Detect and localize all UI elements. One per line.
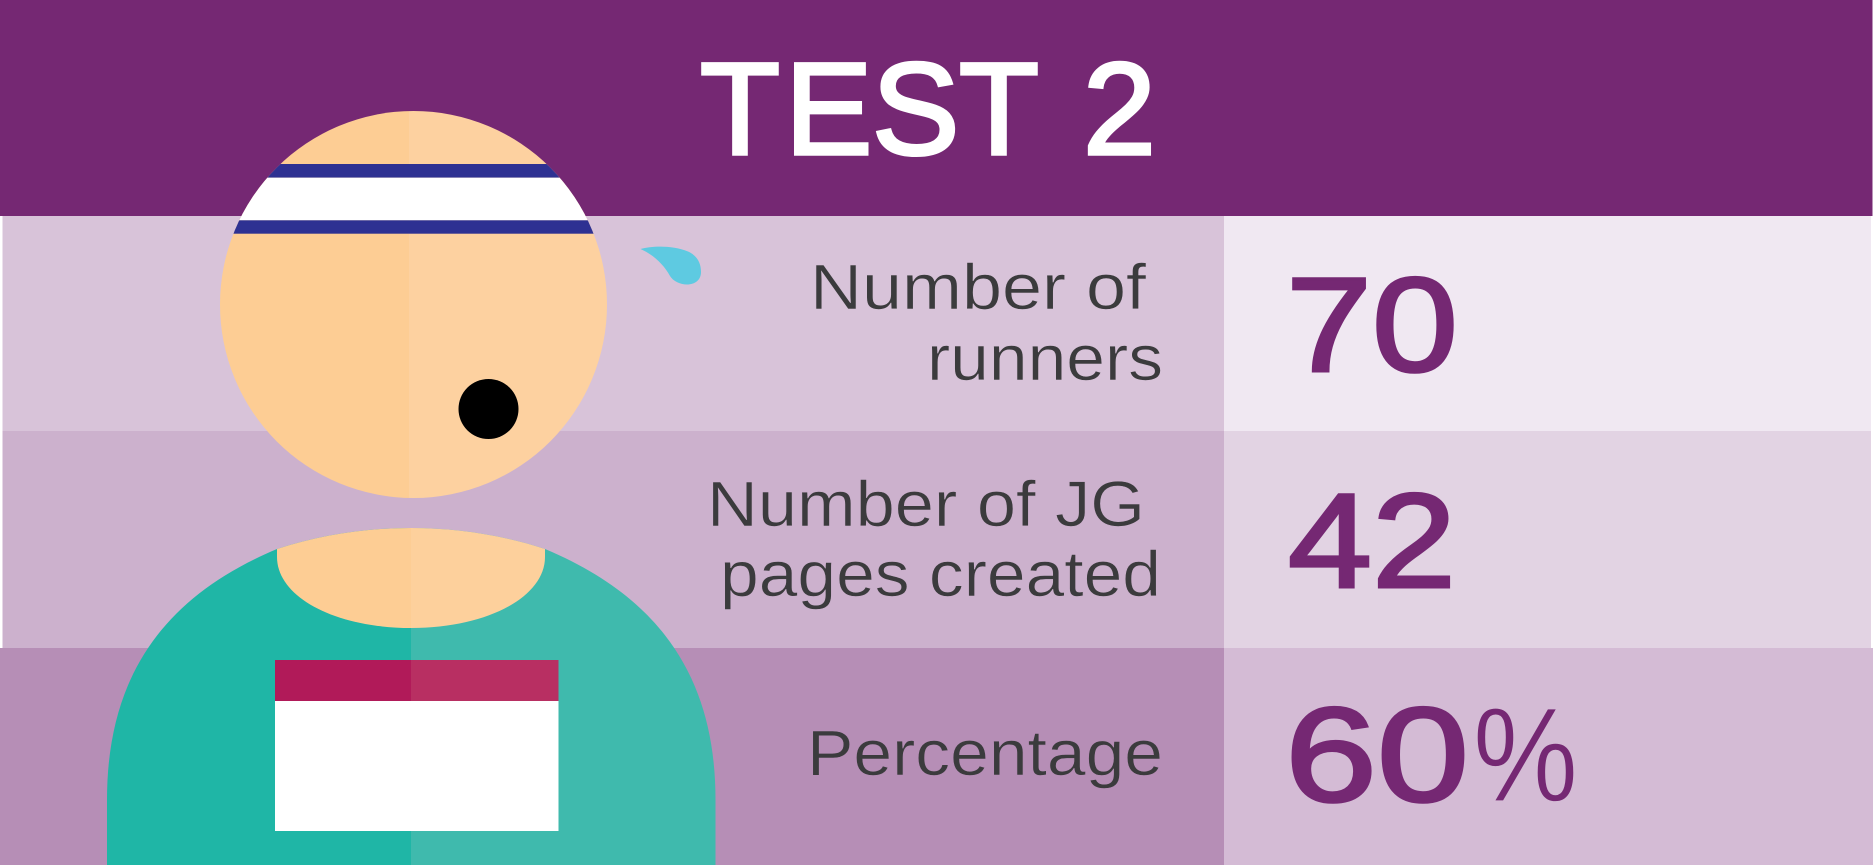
icon: race bib <box>275 660 558 831</box>
label: number of JG pages created <box>707 468 1161 610</box>
icon: runner head <box>215 105 613 505</box>
panel: row 3 label background <box>0 648 1224 865</box>
icon: sweat drop <box>640 247 701 284</box>
panel: row 2 label background <box>2 431 1224 648</box>
label: number of runners: runners <box>927 322 1163 394</box>
title: TEST 2 <box>700 35 1156 182</box>
value: 42: 42 <box>1288 467 1456 616</box>
label: number of JG pages created: pages created <box>720 538 1161 610</box>
value: 70: 70 <box>1286 251 1458 400</box>
label: number of runners: Number of <box>810 251 1146 323</box>
value: 60%: % <box>1473 681 1578 830</box>
value: 60% <box>1285 681 1578 830</box>
label: number of runners <box>810 251 1163 394</box>
panel: row 1 label background <box>2 216 1224 431</box>
icon: runner body <box>107 528 716 865</box>
icon: runner neck <box>277 528 545 628</box>
label: percentage: Percentage <box>807 717 1163 789</box>
label: number of JG pages created: Number of JG <box>707 468 1145 540</box>
panel: row 1 value background <box>1224 216 1871 431</box>
icon: runner figure <box>107 105 716 865</box>
icon: runner mouth <box>458 379 518 439</box>
panel: row 3 value background <box>1224 648 1873 865</box>
panel: row 2 value background <box>1224 431 1871 648</box>
panel: header bar <box>0 0 1872 216</box>
value: 60%: 60 <box>1285 681 1469 830</box>
